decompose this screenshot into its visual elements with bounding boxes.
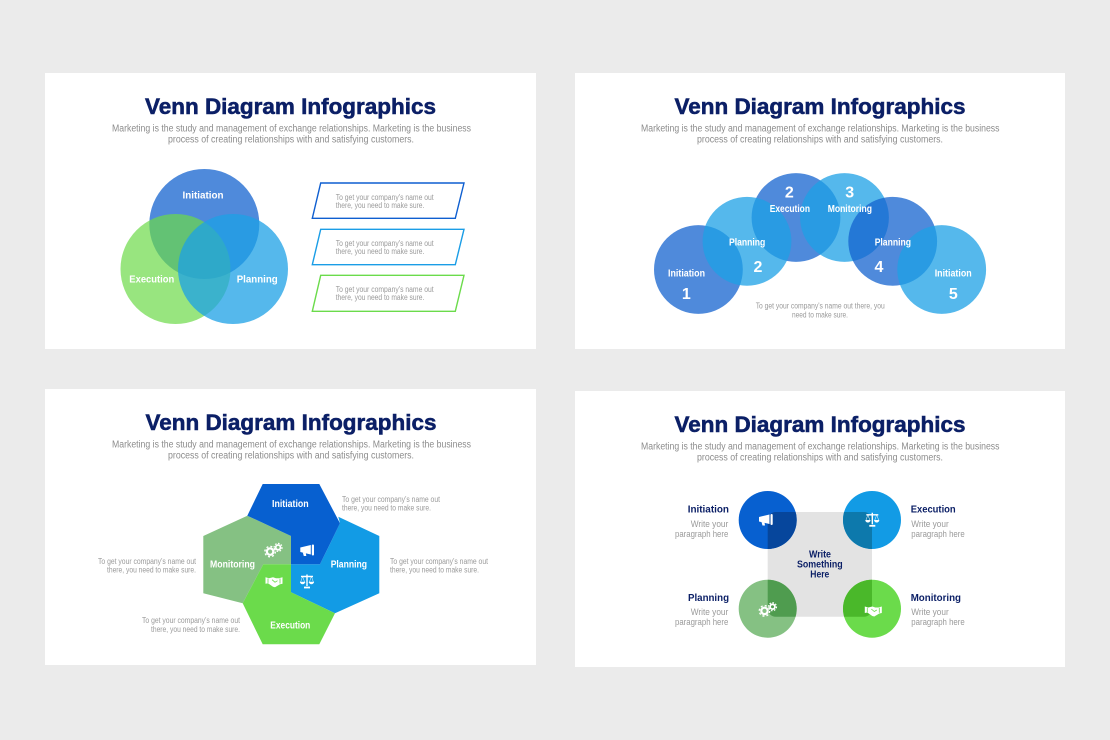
venn chain: six circles: Initiation (935, 268, 972, 279)
venn chain: six circles: 5 (949, 286, 958, 303)
circle: monitoring (843, 580, 901, 638)
panel: hexagon venn (45, 389, 536, 665)
note: right: To get your company's name out (390, 557, 489, 566)
label: initiation: Initiation (688, 505, 729, 516)
note: left: there, you need to make sure. (107, 566, 196, 574)
icon: scales (866, 513, 879, 526)
text box: green parallelogram: To get your company's name out (336, 285, 434, 294)
venn chain: six circles: Planning (875, 237, 911, 248)
venn diagram: three circles: Execution (129, 274, 174, 285)
venn chain: six circles: 4 (875, 259, 884, 276)
note: bottom left (142, 616, 241, 634)
text box: blue parallelogram (312, 183, 464, 218)
note: top right: To get your company's name out (342, 495, 441, 504)
venn chain: six circles: 3 (845, 184, 854, 201)
label: execution: paragraph here (911, 529, 965, 539)
label: initiation (675, 505, 729, 539)
text box: blue parallelogram: there, you need to make sure. (336, 201, 424, 210)
note: bottom left: there, you need to make sure. (151, 625, 240, 634)
segment: initiation (247, 484, 340, 564)
panel: four circles around square (575, 391, 1065, 667)
panel: chain of circles (575, 73, 1065, 349)
text box: green parallelogram: there, you need to make sure. (336, 293, 424, 302)
caption: need to make sure. (792, 310, 848, 319)
note: bottom left: To get your company's name out (142, 616, 241, 625)
venn chain: six circles: Planning (729, 237, 765, 248)
subtitle: process of creating relationships with and satisfying customers. (697, 452, 943, 464)
subtitle (112, 440, 471, 462)
note: left: To get your company's name out (98, 557, 197, 566)
hexagon diagram: Monitoring (210, 560, 255, 571)
text box: light blue parallelogram: there, you need to make sure. (336, 247, 424, 256)
subtitle: Marketing is the study and management of exchange relationships. Marketing is the business (112, 124, 471, 134)
label: initiation: paragraph here (675, 529, 728, 539)
caption: To get your company's name out there, you (756, 302, 885, 311)
venn chain: six circles: 2 (754, 259, 763, 276)
label: planning: Write your (691, 607, 728, 617)
subtitle (112, 124, 471, 146)
text box: green parallelogram (312, 275, 464, 311)
panel: three circle venn (45, 73, 536, 349)
hexagon diagram: Initiation (272, 499, 309, 510)
note: left (98, 557, 197, 574)
subtitle (641, 442, 1000, 464)
icon: megaphone (759, 514, 773, 526)
icon: handshake (266, 577, 282, 587)
label: planning: Planning (688, 593, 729, 604)
title: Venn Diagram Infographics (674, 94, 966, 119)
label: execution: Write your (911, 519, 949, 529)
label: initiation: Write your (691, 519, 728, 529)
center square: Write (809, 550, 831, 561)
title: Venn Diagram Infographics (674, 412, 966, 437)
segment: execution (243, 564, 335, 644)
text box: light blue parallelogram: To get your company's name out (336, 239, 434, 248)
icon: gears (265, 543, 282, 557)
hexagon diagram: Planning (331, 560, 367, 571)
icon: handshake (865, 606, 882, 616)
subtitle: process of creating relationships with and satisfying customers. (697, 134, 943, 146)
label: monitoring (911, 593, 965, 627)
venn chain: six circles: Monitoring (828, 204, 872, 215)
title: Venn Diagram Infographics (146, 410, 436, 435)
icon: megaphone (300, 544, 314, 556)
icon: scales (300, 574, 314, 588)
venn chain: six circles: Initiation (668, 268, 705, 279)
center square: Something (797, 560, 843, 571)
label: monitoring: paragraph here (911, 617, 965, 627)
hexagon diagram: Execution (270, 621, 310, 632)
subtitle: process of creating relationships with and satisfying customers. (168, 134, 414, 146)
subtitle: Marketing is the study and management of exchange relationships. Marketing is the business (641, 124, 1000, 134)
subtitle: Marketing is the study and management of exchange relationships. Marketing is the business (112, 440, 471, 450)
icon: gears (759, 603, 776, 616)
center square (768, 512, 872, 617)
circle: planning (738, 580, 797, 638)
label: execution (911, 505, 965, 539)
hexagon diagram (203, 484, 379, 644)
circle: execution (843, 491, 901, 549)
label: planning: paragraph here (675, 617, 728, 627)
venn chain: six circles: Execution (770, 204, 810, 215)
segment: planning (291, 517, 379, 613)
venn diagram: three circles: Planning (237, 274, 278, 285)
text box: blue parallelogram: To get your company's name out (336, 193, 434, 202)
circle: initiation (738, 491, 797, 549)
venn diagram: three circles (120, 169, 288, 324)
text box: light blue parallelogram (312, 229, 464, 265)
label: execution: Execution (911, 505, 956, 516)
venn chain: six circles: 1 (682, 286, 691, 303)
subtitle: Marketing is the study and management of exchange relationships. Marketing is the business (641, 442, 1000, 452)
subtitle (641, 124, 1000, 146)
subtitle: process of creating relationships with and satisfying customers. (168, 450, 414, 462)
venn diagram: three circles: Initiation (182, 190, 224, 201)
segment: monitoring (203, 516, 291, 603)
note: right: there, you need to make sure. (390, 566, 479, 574)
label: monitoring: Monitoring (911, 593, 961, 604)
note: right (390, 557, 489, 574)
label: planning (675, 593, 729, 627)
center square: Here (810, 570, 830, 581)
venn chain: six circles: 2 (785, 184, 794, 201)
venn chain: six circles (654, 173, 986, 314)
note: top right: there, you need to make sure. (342, 504, 431, 512)
title: Venn Diagram Infographics (145, 94, 436, 119)
caption (756, 302, 885, 319)
note: top right (342, 495, 441, 512)
label: monitoring: Write your (911, 607, 949, 617)
